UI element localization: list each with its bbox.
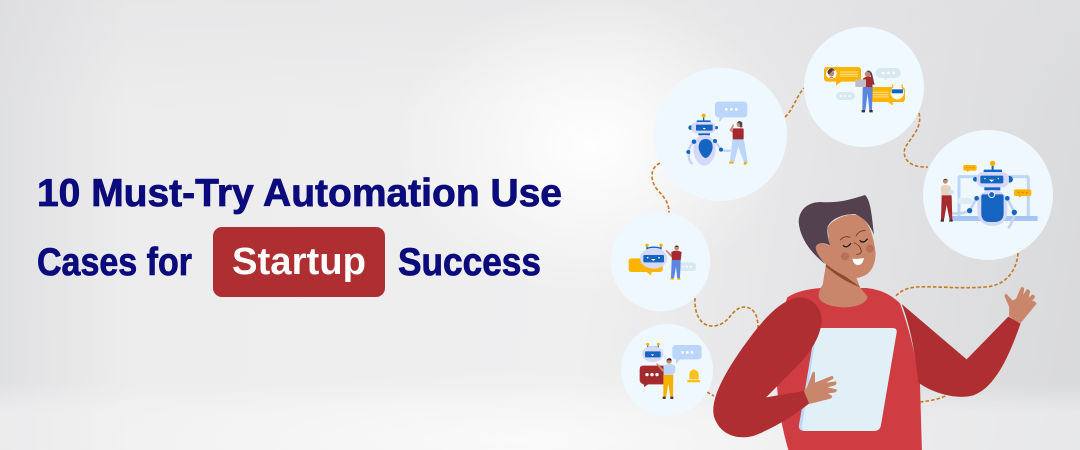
tablet — [799, 328, 897, 431]
title — [37, 172, 562, 297]
icon: person — [729, 121, 748, 165]
hair — [799, 195, 874, 265]
icon: robot head — [640, 244, 667, 269]
icon: small bubbles — [957, 165, 1031, 204]
icon: man with tablet — [941, 179, 954, 222]
circle 1: robot and user chat — [654, 68, 787, 201]
icon: bell — [687, 368, 700, 382]
icon: robot head — [642, 343, 663, 362]
smile — [852, 258, 864, 265]
icon: grey bubbles — [836, 68, 901, 100]
neck shadow — [826, 264, 861, 287]
icon: blue bubble — [672, 345, 702, 364]
main character — [713, 195, 1036, 450]
torso — [773, 288, 922, 450]
circle 4: robot on bubble — [611, 212, 710, 311]
icon: yellow bubble with robot — [868, 85, 905, 106]
title line 2 start: Cases for — [37, 241, 192, 284]
icon: big robot — [952, 161, 1017, 228]
left arm sleeve — [713, 297, 822, 437]
highlight pill: Startup — [232, 241, 366, 283]
icon: person — [665, 245, 682, 280]
icon: speech bubble — [715, 102, 747, 122]
circle 2: chat messages — [804, 27, 924, 147]
title line 1: 10 Must-Try Automation Use — [37, 172, 562, 215]
circle 3: robot at screen — [923, 130, 1053, 260]
icon: red bubble — [640, 366, 664, 387]
left hand — [804, 372, 837, 404]
icon: woman with laptop — [855, 70, 875, 112]
icon: robot — [686, 114, 731, 166]
icon: yellow bubble — [629, 258, 663, 275]
circle 5: robot and support — [621, 324, 713, 416]
icon: yellow bubble with avatar — [824, 67, 861, 86]
icon: screen frame — [952, 177, 1038, 221]
raised hand — [1005, 288, 1036, 323]
head — [799, 195, 876, 278]
right arm sleeve — [902, 304, 1021, 397]
neck and collar — [819, 264, 868, 307]
title line 2 end: Success — [398, 241, 541, 284]
cheeks — [841, 245, 874, 260]
icon: person — [656, 358, 675, 399]
icon: pale bubble — [679, 262, 696, 271]
highlight pill — [213, 227, 385, 297]
eyes, brows, nose — [840, 231, 867, 254]
face — [815, 215, 876, 278]
dashed connector lines — [652, 88, 1018, 402]
